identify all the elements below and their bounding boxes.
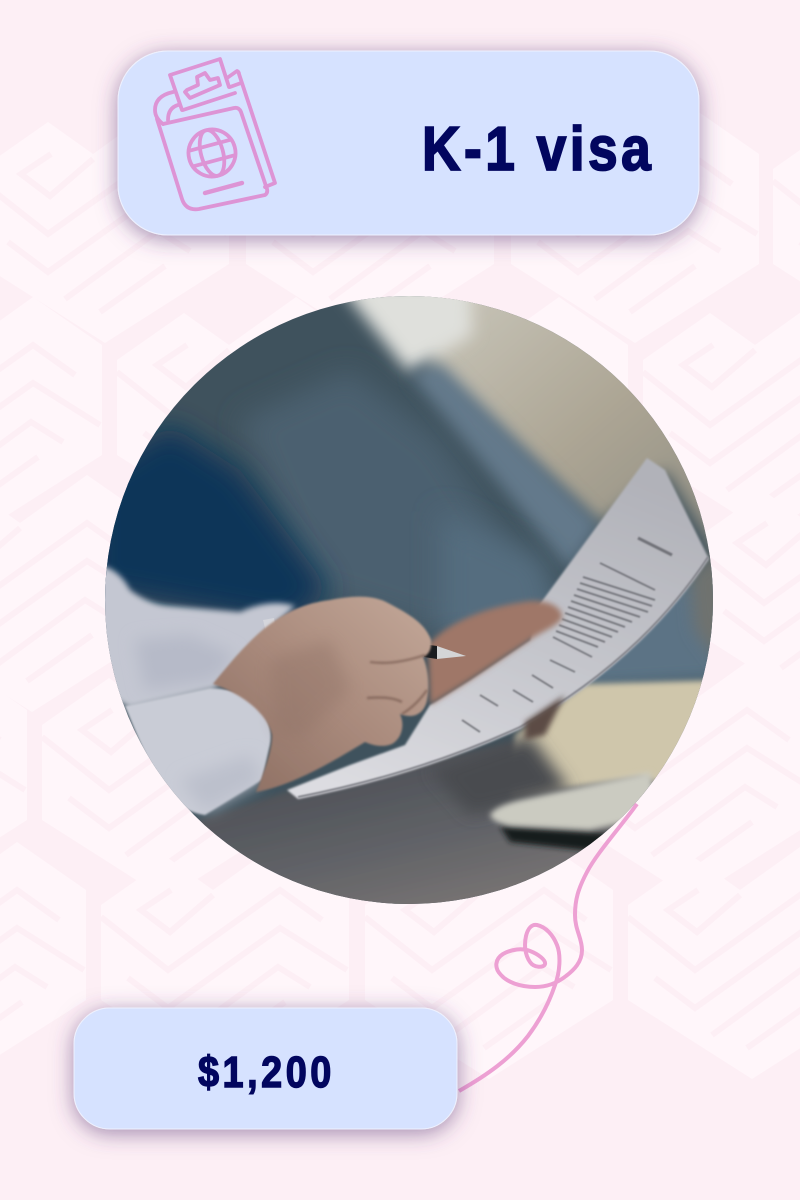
desk surface xyxy=(200,676,703,904)
laptop on desk xyxy=(490,772,660,852)
photo: hands reviewing a document xyxy=(105,296,713,904)
title text: K-1 visa xyxy=(422,115,652,184)
panel: price pill xyxy=(74,1008,457,1129)
far hand holding document xyxy=(428,601,565,740)
panel: visa title pill xyxy=(118,51,699,235)
shirt sleeve xyxy=(100,565,295,815)
document xyxy=(287,458,709,799)
near hand with pen xyxy=(213,597,466,792)
decorative heart-loop connector line xyxy=(459,804,637,1091)
price text: $1,200 xyxy=(198,1047,331,1097)
icon: passport with ticket and globe xyxy=(155,59,275,209)
infographic canvas xyxy=(58,39,715,1149)
